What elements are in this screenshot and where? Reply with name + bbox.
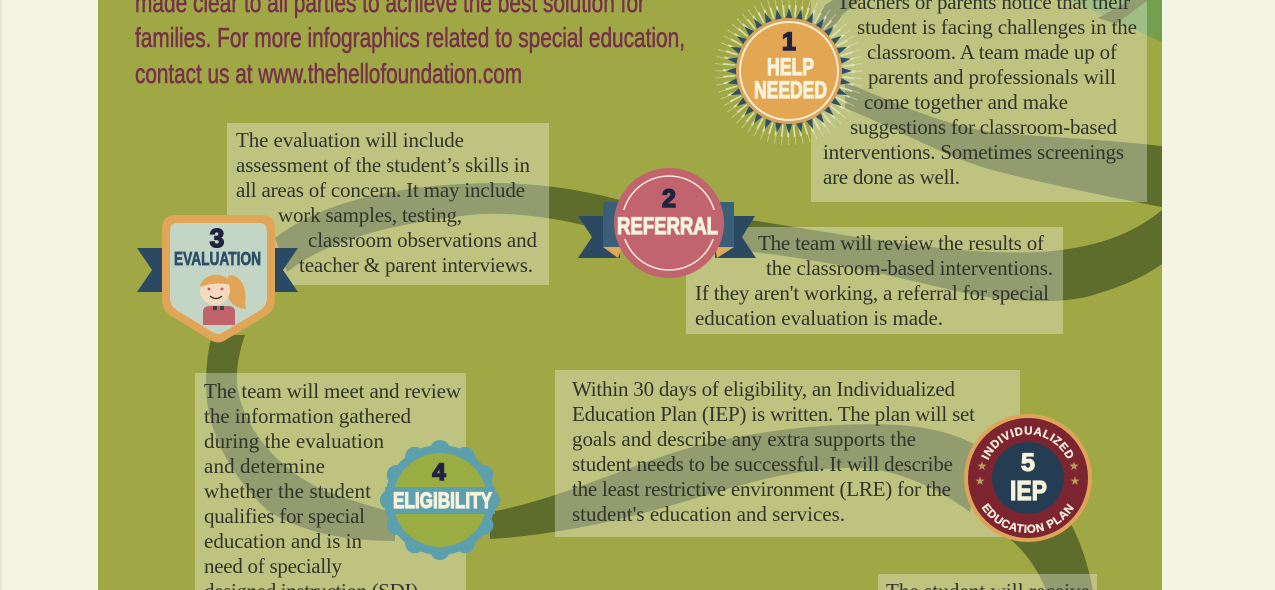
badge: step 3 evaluation [137,215,298,342]
panel: step 3 evaluation text: assessment of the student’s skills in [236,153,530,177]
panel: step 4 eligibility text [195,373,466,590]
panel: step 4 eligibility text: during the evaluation [204,429,384,453]
heading text: contact us at www.thehellofoundation.com [135,58,522,89]
panel: step 3 evaluation text [227,123,549,285]
panel: step 4 eligibility text: whether the student [204,479,371,503]
badge: step 2 referral: REFERRAL [617,213,718,240]
panel: step 5 IEP text [555,370,1020,537]
panel: step 1 help needed text: parents and professionals will [868,65,1116,89]
panel: step 4 eligibility text: and determine [204,454,325,478]
panel: step 1 help needed text: are done as well. [823,165,960,189]
icon: girl [200,275,246,325]
panel: step 3 evaluation text: all areas of concern. It may include [236,178,525,202]
panel: step 4 eligibility text: the information gathered [204,404,412,428]
panel: step 1 help needed text: interventions. Sometimes screenings [823,140,1124,164]
panel: step 3 evaluation text: The evaluation will include [236,128,464,152]
panel: step 1 help needed text: come together and make [864,90,1068,114]
badge: step 5 IEP: ★ [975,474,985,488]
panel: step 2 referral text: the classroom-based interventions. [766,256,1053,280]
panel: step 1 help needed text [811,0,1147,202]
panel: step 4 eligibility text: need of specially [204,554,342,578]
panel: step 5 IEP text: student's education and services. [572,502,845,526]
badge: step 3 evaluation: EVALUATION [174,249,261,269]
badge: step 5 IEP: EDUCATION PLAN [982,503,1074,533]
panel: next step text [878,574,1097,590]
badge: step 5 IEP: 5 [1021,449,1035,477]
panel: step 2 referral text: education evaluation is made. [695,306,943,330]
heading text: families. For more infographics related to special education, [135,22,685,53]
badge: step 1 help needed: HELP [767,54,814,81]
badge: step 2 referral [578,168,756,278]
panel: step 1 help needed text: student is facing challenges in the [857,15,1137,39]
panel: step 1 help needed text: classroom. A team made up of [867,40,1117,64]
panel: step 4 eligibility text: The team will meet and review [204,379,462,403]
panel: step 3 evaluation text: work samples, testing, [278,203,462,227]
badge: step 5 IEP [964,414,1092,542]
panel: step 2 referral text: If they aren't working, a referral for special [695,281,1049,305]
badge: step 4 eligibility [380,440,500,560]
badge: step 1 help needed: NEEDED [754,77,827,104]
badge: step 1 help needed [720,2,858,140]
panel: step 5 IEP text: Within 30 days of eligibility, an Individualized [572,377,956,401]
panel: step 2 referral text: The team will review the results of [758,231,1044,255]
badge: step 4 eligibility: 4 [432,459,446,486]
panel: step 5 IEP text: the least restrictive environment (LRE) for the [572,477,951,501]
panel: step 5 IEP text: Education Plan (IEP) is written. The plan will set [572,402,975,426]
badge: step 5 IEP: ★ [1069,459,1079,473]
badge: step 4 eligibility: ELIGIBILITY [393,488,492,513]
badge: step 2 referral: 2 [662,185,676,213]
panel: step 4 eligibility text: qualifies for special [204,504,365,528]
panel: step 1 help needed text: suggestions for classroom-based [850,115,1118,139]
badge: step 5 IEP: IEP [1010,475,1047,506]
panel: step 2 referral text [686,227,1063,334]
badge: step 5 IEP: INDIVIDUALIZED [981,426,1074,460]
badge: step 3 evaluation: 3 [210,223,224,253]
panel: step 5 IEP text: student needs to be successful. It will describe [572,452,953,476]
panel: step 3 evaluation text: teacher & parent interviews. [299,253,533,277]
panel: step 5 IEP text: goals and describe any extra supports the [572,427,916,451]
panel: step 3 evaluation text: classroom observations and [308,228,538,252]
badge: step 5 IEP: ★ [1070,474,1080,488]
heading text [135,0,685,89]
winding road path [206,0,1162,590]
badge: step 1 help needed: 1 [782,28,796,56]
badge: step 5 IEP: ★ [977,459,987,473]
panel: step 4 eligibility text: education and is in [204,529,362,553]
